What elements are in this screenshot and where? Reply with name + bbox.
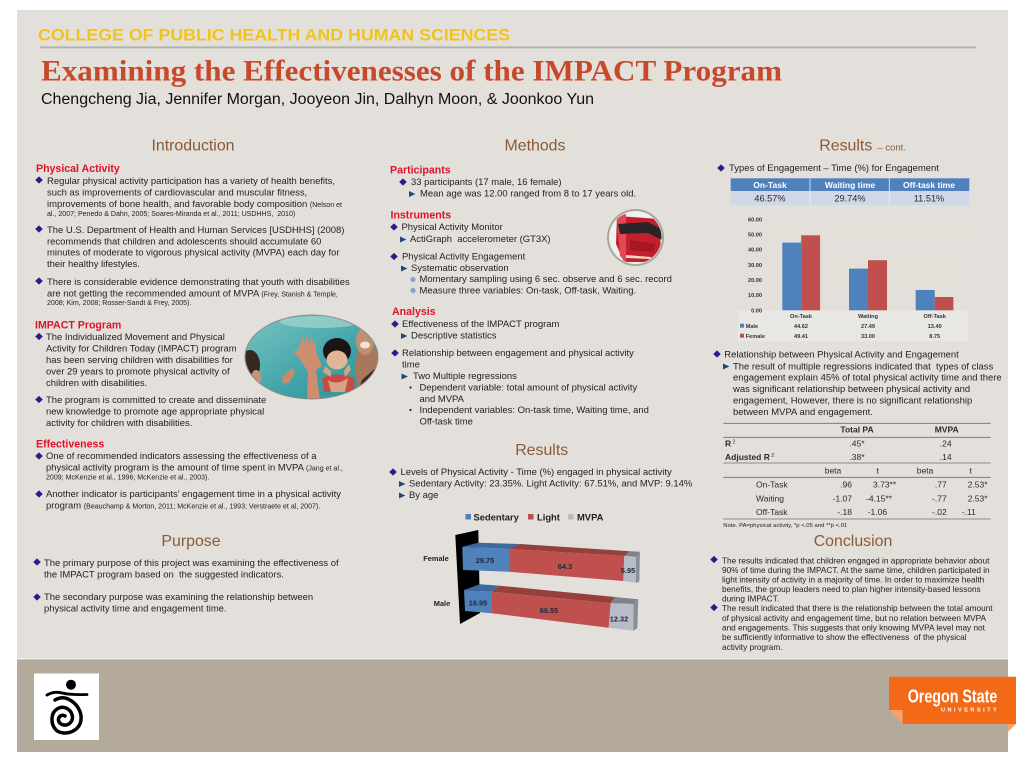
subsection: physical activity: such as improvements of cardiovascular and muscular fitness, — [47, 188, 307, 198]
heading: purpose: Purpose — [161, 533, 221, 550]
subsection: analysis: Two Multiple regressions — [413, 371, 517, 382]
table: regression results: .45* — [849, 439, 865, 449]
data table: 13.40 — [928, 324, 942, 330]
table: regression results: .24 — [940, 439, 952, 449]
data table: On-Task — [790, 314, 813, 320]
panel: conclusion — [710, 533, 993, 652]
heading: results: Results — [515, 442, 568, 459]
logo: Oregon State University — [889, 677, 1016, 732]
authors: Chengcheng Jia, Jennifer Morgan, Jooyeon Jin, Dalhyn Moon, & Joonkoo Yun — [41, 91, 594, 108]
data table — [740, 314, 947, 340]
heading: methods: Methods — [505, 138, 566, 155]
footer band — [17, 659, 1008, 752]
logo: Oregon State University: Oregon State — [908, 685, 997, 706]
subsection: impact program: The Individualized Movement and Physical — [46, 332, 225, 343]
subsection: analysis: Independent variables: On-task time, Waiting time, and — [420, 405, 649, 416]
gridlines and axis: 20.00 — [748, 278, 762, 284]
subsection: impact program — [35, 320, 266, 429]
table: regression results: MVPA — [935, 424, 959, 434]
table: regression results: beta — [825, 465, 842, 475]
stacked 3D bar chart: activity by gender — [423, 512, 640, 631]
subsection: participants: 33 participants (17 male, 16 female) — [411, 177, 562, 188]
bar labels: 5.95 — [621, 566, 635, 575]
subsection: impact program: over 29 years to promote physical activity of — [46, 366, 230, 378]
table: regression results: 2.53* — [968, 494, 988, 504]
table: regression results: Adjusted R — [725, 452, 770, 462]
results text: By age — [409, 490, 438, 501]
bar labels: 12.32 — [610, 614, 628, 624]
table: engagement time: 29.74% — [834, 194, 866, 204]
relationship statement: The result of multiple regressions indicated that types of class — [733, 361, 993, 372]
results text: Levels of Physical Activity - Time (%) engaged in physical activity — [400, 467, 672, 478]
conclusion text: activity program. — [722, 643, 783, 652]
table: regression results: 3.73** — [873, 480, 897, 490]
table note: Note. PA=physical activity, *p <.05 and **p <.01 — [723, 523, 847, 529]
subsection: physical activity: improvements of bone health, and favorable body composition (Nelson et — [47, 199, 342, 210]
relationship statement: engagement explain 45% of total physical activity time and there — [733, 373, 1002, 384]
table: regression results: .14 — [940, 452, 952, 462]
subsection: analysis: and MVPA — [420, 394, 465, 405]
subsection: physical activity: recommends that children and adolescents should accumulate 60 — [47, 236, 321, 248]
heading: conclusion: Conclusion — [814, 533, 892, 550]
subsection: effectiveness: One of recommended indicators assessing the effectiveness of a — [46, 451, 317, 462]
subsection: physical activity: minutes of moderate to vigorous physical activity (MVPA) each day for — [47, 248, 340, 259]
subsection: instruments: Physical Activity Monitor — [402, 222, 503, 233]
table: regression results: -1.06 — [868, 507, 887, 517]
subsection: instruments: ActiGraph accelerometer (GT3X) — [410, 234, 551, 245]
conclusion text: benefits, the group leaders need to plan higher intensity-based lessons — [722, 585, 981, 594]
title: Examining the Effectivenesses of the IMPACT Program — [41, 55, 782, 88]
gridlines and axis — [748, 217, 967, 314]
subsection: analysis: Effectiveness of the IMPACT program — [402, 319, 559, 330]
bar labels: Female — [423, 554, 449, 563]
table: regression results: Waiting — [756, 494, 784, 504]
purpose statements — [33, 558, 339, 614]
subsection: physical activity: their healthy lifestyles. — [47, 259, 140, 270]
relationship statement — [713, 349, 1002, 418]
gridlines and axis: 30.00 — [748, 263, 762, 269]
table: regression results: -.77 — [932, 494, 947, 504]
subsection: analysis: Analysis — [392, 306, 436, 318]
bars — [782, 235, 953, 310]
subsection: physical activity: al., 2007; Penedo & Dahn, 2005; Soares-Miranda et al., 2011; USDHHS, 2010) — [47, 211, 295, 218]
data table: 27.49 — [861, 324, 875, 330]
table: regression results — [723, 423, 991, 529]
subsection: participants: Participants — [390, 164, 451, 176]
table: regression results: -.11 — [962, 507, 976, 517]
purpose statements: The secondary purpose was examining the relationship between — [44, 592, 313, 603]
panel: methods — [390, 138, 672, 428]
bar labels: Male — [434, 599, 450, 608]
relationship statement: Relationship between Physical Activity and Engagement — [724, 349, 959, 360]
table: regression results: t — [970, 465, 973, 475]
subsection: impact program: The program is committed to create and disseminate — [46, 395, 266, 406]
subsection: impact program: children with disabilities. — [46, 378, 147, 389]
table: engagement time — [731, 178, 969, 205]
subsection: physical activity: 2008; Kim, 2008; Rosser-Sandt & Frey, 2005). — [47, 300, 191, 307]
conclusion text: of physical activity and engagement time, but no relation between MVPA — [722, 614, 986, 623]
relationship statement: was significant relationship between physical activity and — [732, 384, 970, 395]
subsection: effectiveness: physical activity program is the amount of time spent in MVPA (Jang et al., — [46, 462, 343, 474]
subsection: effectiveness: program (Beauchamp & Morton, 2011; McKenzie et al., 1993; Verstraete et al, 2007). — [46, 500, 320, 512]
conclusion text — [710, 556, 993, 652]
subsection: analysis: Descriptive statistics — [411, 330, 497, 342]
table: regression results: Total PA — [840, 424, 874, 434]
relationship statement: between MVPA and engagement. — [733, 407, 873, 418]
bar labels: 29.75 — [476, 556, 494, 565]
data table: 49.41 — [794, 334, 808, 340]
bar: male — [464, 584, 638, 631]
chart legend: MVPA — [577, 512, 604, 522]
subsection: impact program: IMPACT Program — [35, 320, 121, 332]
chart legend — [466, 512, 604, 522]
subsection: instruments: Systematic observation — [411, 263, 509, 274]
results text: Sedentary Activity: 23.35%. Light Activity: 67.51%, and MVP: 9.14% — [409, 478, 693, 490]
table: regression results: .77 — [935, 480, 947, 490]
heading: results cont.: Results – cont. — [819, 138, 906, 155]
subsection: effectiveness: Effectiveness — [36, 438, 104, 450]
conclusion text: The results indicated that children engaged in appropriate behavior about — [722, 556, 990, 565]
subsection: participants: Mean age was 12.00 ranged from 8 to 17 years old. — [420, 188, 636, 200]
table: engagement time: 11.51% — [914, 194, 944, 204]
subsection: effectiveness — [35, 438, 343, 512]
table: regression results: -4.15** — [866, 494, 893, 504]
purpose statements: the IMPACT program based on the suggested indicators. — [44, 570, 284, 580]
table: regression results: On-Task — [756, 480, 788, 490]
table: regression results: t — [877, 465, 880, 475]
bar labels: 64.3 — [558, 562, 572, 571]
college name: COLLEGE OF PUBLIC HEALTH AND HUMAN SCIENCES — [38, 27, 510, 45]
subsection: analysis: Relationship between engagement and physical activity — [402, 348, 634, 359]
table: regression results: -.18 — [837, 507, 852, 517]
subsection: analysis: time — [402, 360, 420, 370]
table: regression results: .96 — [840, 480, 852, 490]
table: regression results: -1.07 — [833, 494, 852, 504]
subsection: participants — [390, 164, 636, 200]
subsection: instruments: Measure three variables: On-task, Off-task, Waiting. — [420, 286, 636, 296]
subsection: impact program: Activity for Children Today (IMPACT) program — [46, 344, 237, 354]
table: regression results: 2 — [770, 453, 774, 459]
subsection: effectiveness: 2009; McKenzie et al., 1996; McKenzie et al., 2003). — [46, 474, 209, 482]
chart legend: Sedentary — [474, 512, 520, 522]
conclusion text: The result indicated that there is the relationship between the total amount — [722, 604, 993, 613]
logo: IMPACT spiral figure — [34, 674, 99, 740]
subsection: physical activity: There is considerable evidence demonstrating that youth with disabilities — [47, 277, 350, 288]
bar chart: engagement by gender — [738, 217, 968, 341]
subsection: physical activity — [35, 163, 350, 307]
subsection: analysis — [391, 306, 649, 428]
table: regression results: R — [725, 439, 731, 449]
subsection: physical activity: Physical Activity — [36, 163, 120, 175]
table: engagement time: On-Task — [753, 180, 787, 190]
data table: Waiting — [858, 314, 879, 320]
table: engagement time: 46.57% — [754, 194, 786, 204]
gridlines and axis: 40.00 — [748, 248, 762, 254]
subsection: impact program: has been serving children with disabilities for — [46, 355, 233, 366]
conclusion text: 90% of time during the IMPACT. At the same time, children participated in — [722, 566, 990, 575]
table: regression results: 2 — [731, 440, 736, 446]
subsection: instruments — [390, 210, 672, 296]
gridlines and axis: 10.00 — [748, 293, 762, 299]
conclusion text: be sufficiently informative to show the effectiveness of the physical — [722, 633, 967, 642]
panel: results continued — [713, 138, 1002, 529]
bar labels: 16.95 — [469, 598, 487, 608]
table: engagement time: Waiting time — [825, 180, 875, 190]
table: regression results: Off-Task — [756, 507, 788, 517]
table: regression results: -.02 — [932, 507, 947, 517]
data table: Off-Task — [924, 314, 947, 320]
subsection: instruments: Instruments — [390, 210, 451, 222]
data table: 33.00 — [861, 334, 875, 340]
panel: purpose — [33, 533, 339, 614]
gridlines and axis: 0.00 — [751, 308, 762, 314]
subsection: physical activity: Regular physical activity participation has a variety of health benefits, — [47, 176, 335, 187]
conclusion text: and engagements. This suggests that only knowing MVPA level may not — [722, 624, 986, 632]
header — [38, 27, 976, 108]
table: regression results: 2.53* — [968, 480, 988, 490]
conclusion text: light intensity of activity in a majority of time. In order to maximize health — [722, 575, 985, 584]
panel: results — [389, 442, 693, 631]
subsection: physical activity: The U.S. Department of Health and Human Services [USDHHS] (2008) — [47, 225, 344, 236]
subsection: instruments: Momentary sampling using 6 sec. observe and 6 sec. record — [420, 274, 672, 285]
photo: child in swimming pool — [240, 314, 380, 400]
logo: Oregon State University: UNIVERSITY — [941, 708, 997, 714]
photo: red accelerometer — [607, 209, 664, 266]
panel: introduction — [35, 138, 380, 512]
table: regression results: .38* — [849, 452, 865, 462]
table: regression results: beta — [917, 465, 934, 475]
subsection: instruments: Physical Activity Engagement — [402, 252, 526, 262]
subsection: impact program: new knowledge to promote age appropriate physical — [46, 406, 264, 418]
purpose statements: physical activity time and engagement time. — [44, 604, 227, 614]
relationship statement: engagement, However, there is no significant relationship — [733, 396, 972, 406]
data table: 8.75 — [929, 334, 940, 340]
subsection: analysis: Dependent variable: total amount of physical activity — [420, 382, 637, 394]
conclusion text: during IMPACT. — [722, 594, 779, 604]
gridlines and axis: 50.00 — [748, 232, 762, 238]
data table: Male — [746, 324, 758, 330]
subsection: effectiveness: Another indicator is participants’ engagement time in a physical activity — [46, 489, 341, 500]
engagement statement: Types of Engagement – Time (%) for Engagement — [729, 163, 939, 174]
subsection: analysis: Off-task time — [420, 416, 473, 428]
bar labels: 66.55 — [540, 606, 558, 615]
data table: Female — [746, 334, 765, 340]
subsection: impact program: activity for children with disabilities. — [46, 418, 192, 429]
chart legend: Light — [537, 512, 560, 522]
data table: 44.62 — [794, 324, 808, 330]
bar: female — [462, 543, 640, 583]
bar labels — [423, 554, 635, 624]
results text — [389, 467, 693, 501]
subsection: physical activity: are not getting the recommended amount of MVPA (Frey, Stanish & Temple, — [47, 288, 338, 300]
purpose statements: The primary purpose of this project was examining the effectiveness of — [44, 558, 339, 569]
gridlines and axis: 60.00 — [748, 217, 762, 223]
table: engagement time: Off-task time — [903, 180, 955, 190]
heading: introduction: Introduction — [151, 138, 235, 155]
